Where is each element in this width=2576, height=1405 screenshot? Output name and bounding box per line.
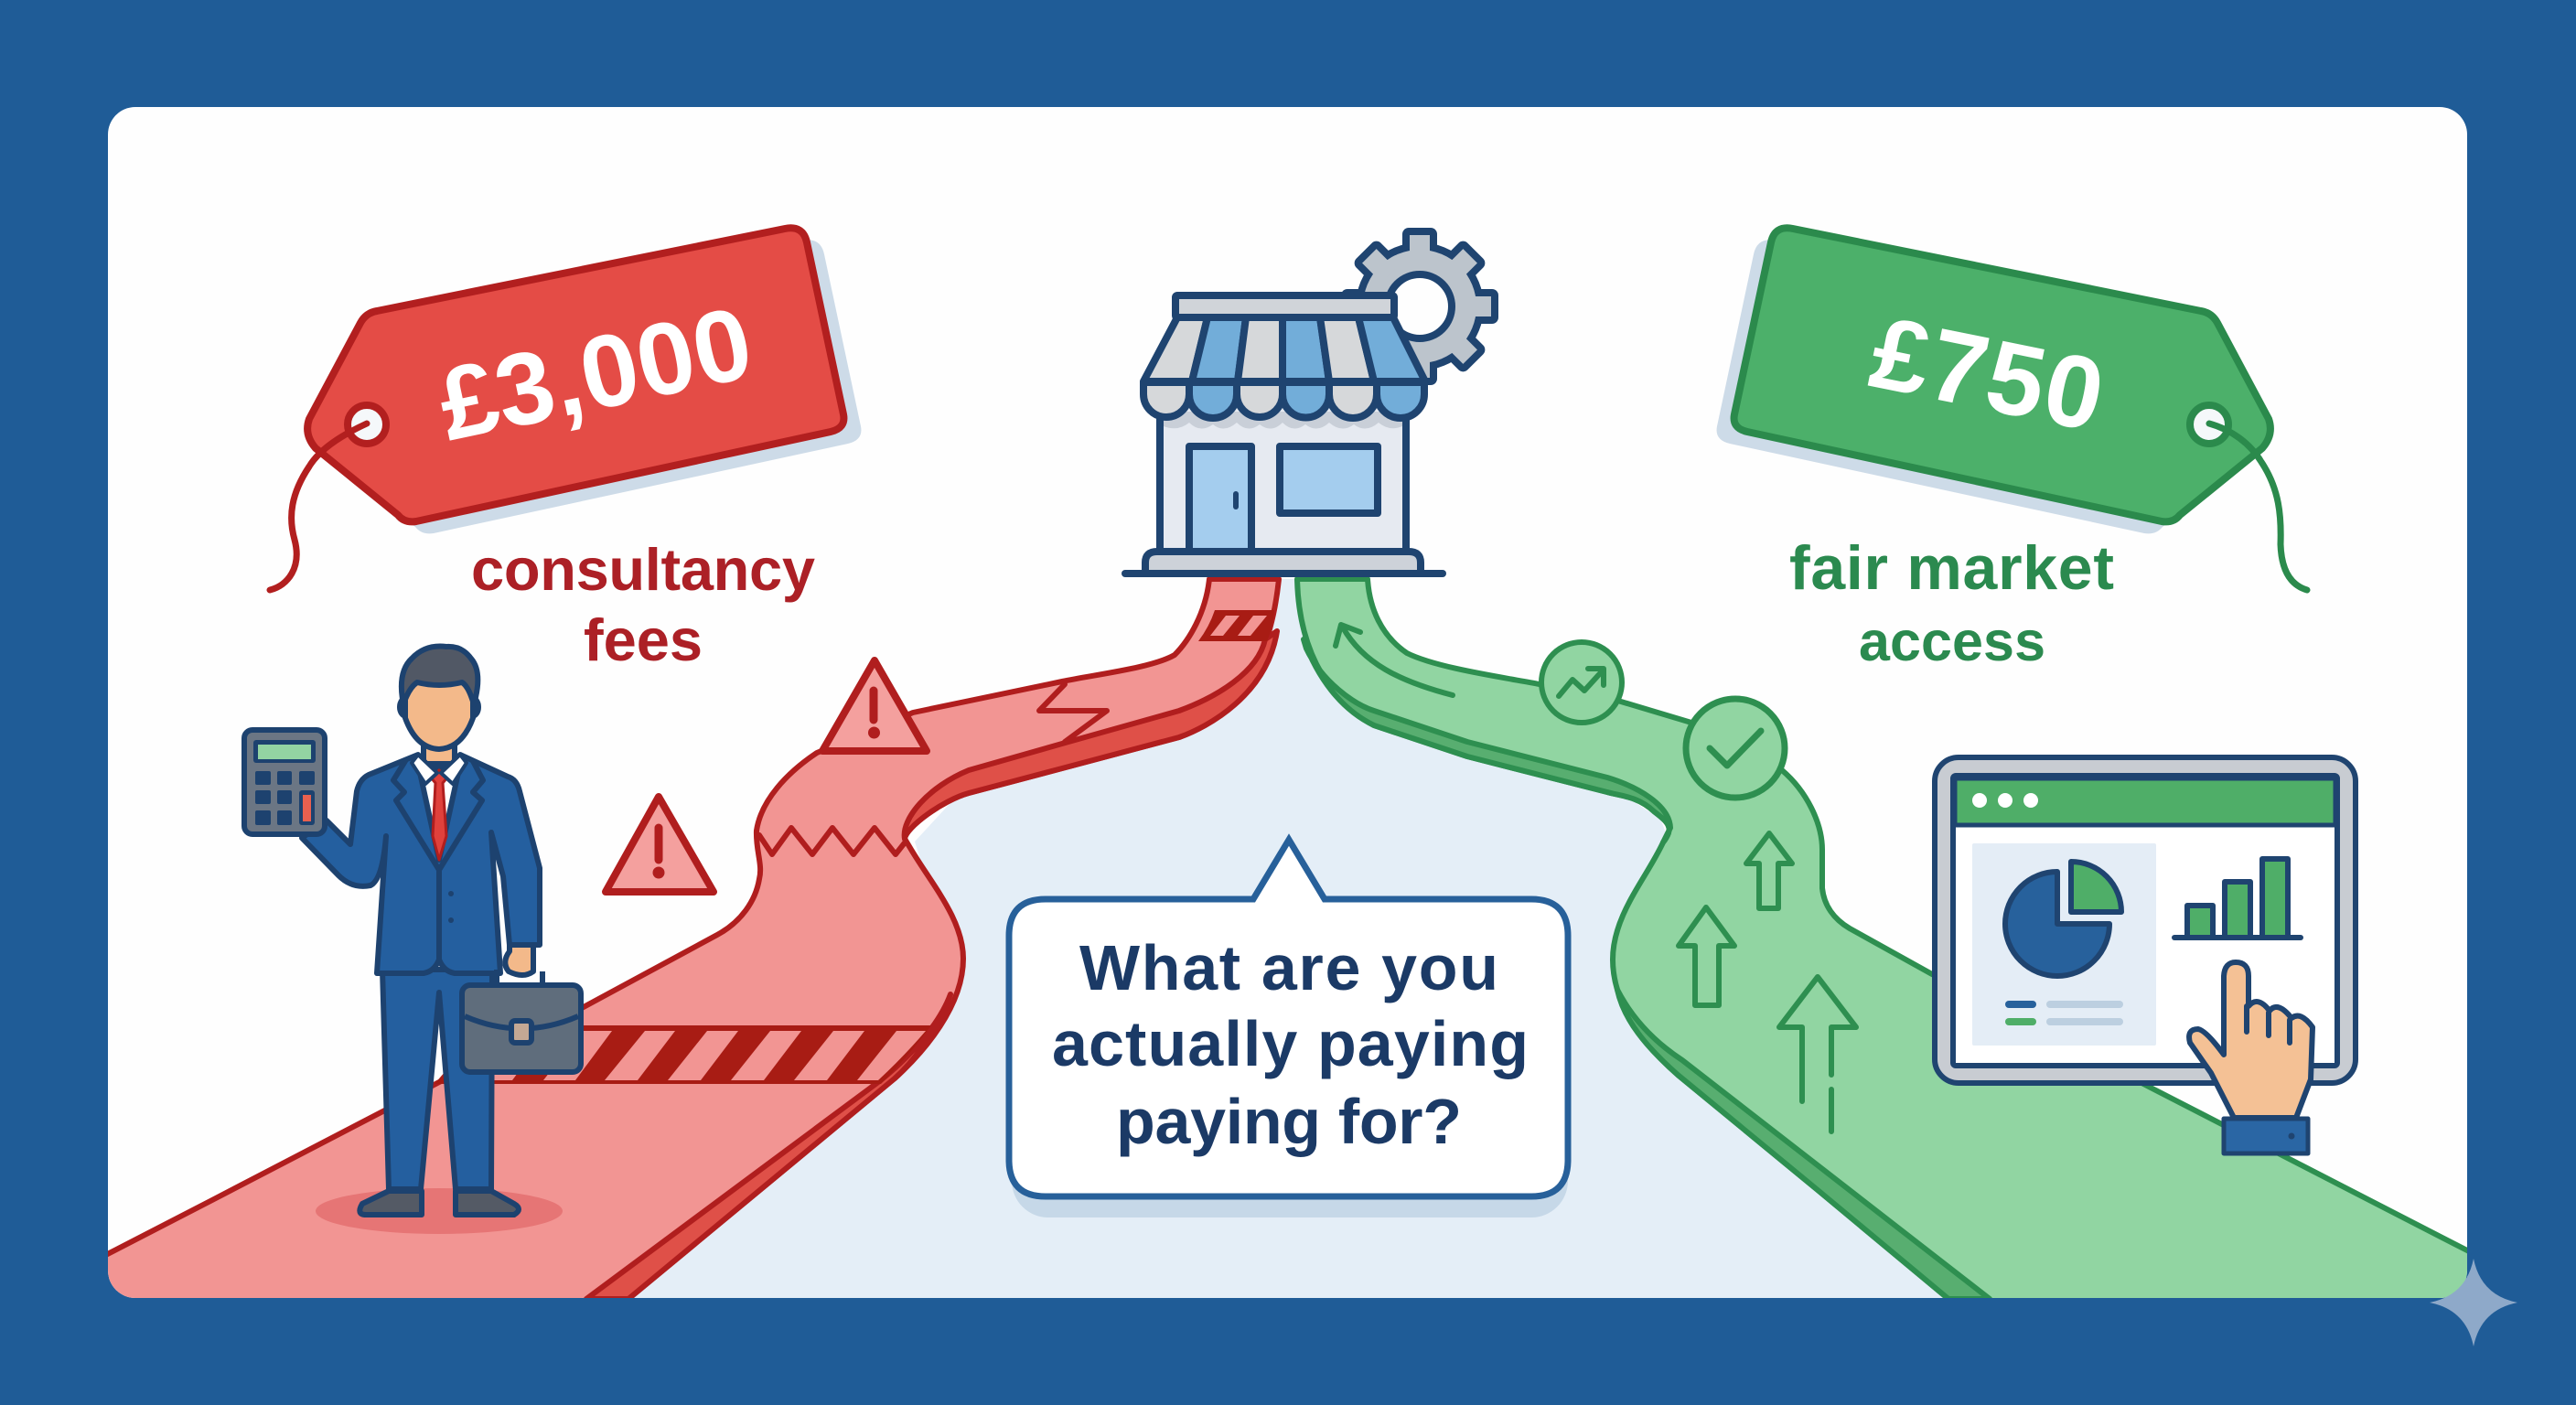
shop base: [1145, 552, 1421, 574]
arrow: medium up: [1679, 907, 1734, 1005]
hand on handle: [505, 945, 533, 975]
title bar: [1955, 778, 2335, 825]
price tag: red: [270, 228, 861, 590]
figure: consultant: [302, 647, 563, 1234]
label: fair market access: fair market: [1789, 533, 2114, 603]
hazard stripe band: [435, 1025, 931, 1084]
tag string: [270, 424, 367, 590]
shirt: [419, 768, 459, 860]
callout: question speech bubble: [1009, 840, 1568, 1217]
bar chart: [2174, 859, 2301, 938]
arrow: small up: [1746, 833, 1792, 908]
green road lower lip: [1617, 990, 1990, 1299]
awning scallops: [1143, 382, 1424, 418]
chart panel: [1972, 843, 2156, 1046]
jacket: [302, 755, 540, 973]
small hazard band near store: [1198, 610, 1274, 641]
road crack: [1039, 684, 1107, 742]
icon: trend badge: [1541, 642, 1622, 723]
icon: gear: [1341, 228, 1498, 385]
trousers: [382, 970, 492, 1189]
red road: [91, 579, 1279, 1326]
icon: sparkle: [2430, 1259, 2517, 1346]
ground shadow: [316, 1188, 563, 1234]
awning panels: [1143, 317, 1425, 381]
jagged road break: [759, 828, 906, 854]
label: consultancy fees: consultancy: [471, 536, 815, 603]
lapels: [393, 761, 483, 870]
icon: check badge: [1686, 699, 1785, 798]
price text: £3,000: [429, 284, 761, 462]
green road: [1297, 579, 2525, 1326]
shop wall: [1160, 402, 1406, 552]
head: [400, 698, 413, 716]
shop door: [1189, 446, 1251, 552]
question text: paying for?: [1116, 1086, 1462, 1157]
icon: briefcase: [462, 970, 581, 1072]
red road lower lip: [586, 994, 950, 1299]
icon: shop front: [1125, 295, 1443, 574]
pie chart: [2005, 862, 2121, 976]
shoes: [360, 1191, 422, 1215]
curved arrow on road: [1336, 625, 1453, 695]
red road upper lip: [905, 631, 1277, 839]
label: fair market access: access: [1859, 610, 2045, 672]
panel: white card: [108, 107, 2467, 1298]
window dots: [1972, 793, 1987, 808]
icon: calculator: [244, 730, 325, 834]
collar: [412, 755, 467, 784]
legend: [2005, 1001, 2123, 1025]
roof bar: [1175, 295, 1394, 317]
arrow: large up: [1779, 977, 1856, 1132]
price tag: green: [1717, 228, 2307, 590]
icon: pointing hand: [2189, 962, 2313, 1153]
icon: dashboard screen: [1935, 757, 2356, 1083]
neck: [424, 736, 455, 764]
ground between the two roads: [604, 579, 2012, 1317]
jacket buttons: [448, 891, 454, 896]
tag string: [2209, 424, 2307, 590]
hair: [402, 647, 478, 704]
label: fair market access: [1789, 533, 2114, 672]
tie: [431, 770, 447, 860]
icon: warning triangle lower: [606, 797, 714, 892]
green road upper lip: [1304, 639, 1670, 842]
cuff: [2224, 1119, 2308, 1153]
icon: warning triangle upper: [822, 660, 927, 751]
question text: What are you: [1079, 932, 1498, 1003]
shop window: [1280, 446, 1378, 513]
question text: [1052, 932, 1529, 1157]
label: consultancy fees: [471, 536, 815, 673]
label: consultancy fees: fees: [584, 606, 703, 673]
price text: £750: [1862, 295, 2113, 453]
question text: actually paying: [1052, 1008, 1529, 1079]
